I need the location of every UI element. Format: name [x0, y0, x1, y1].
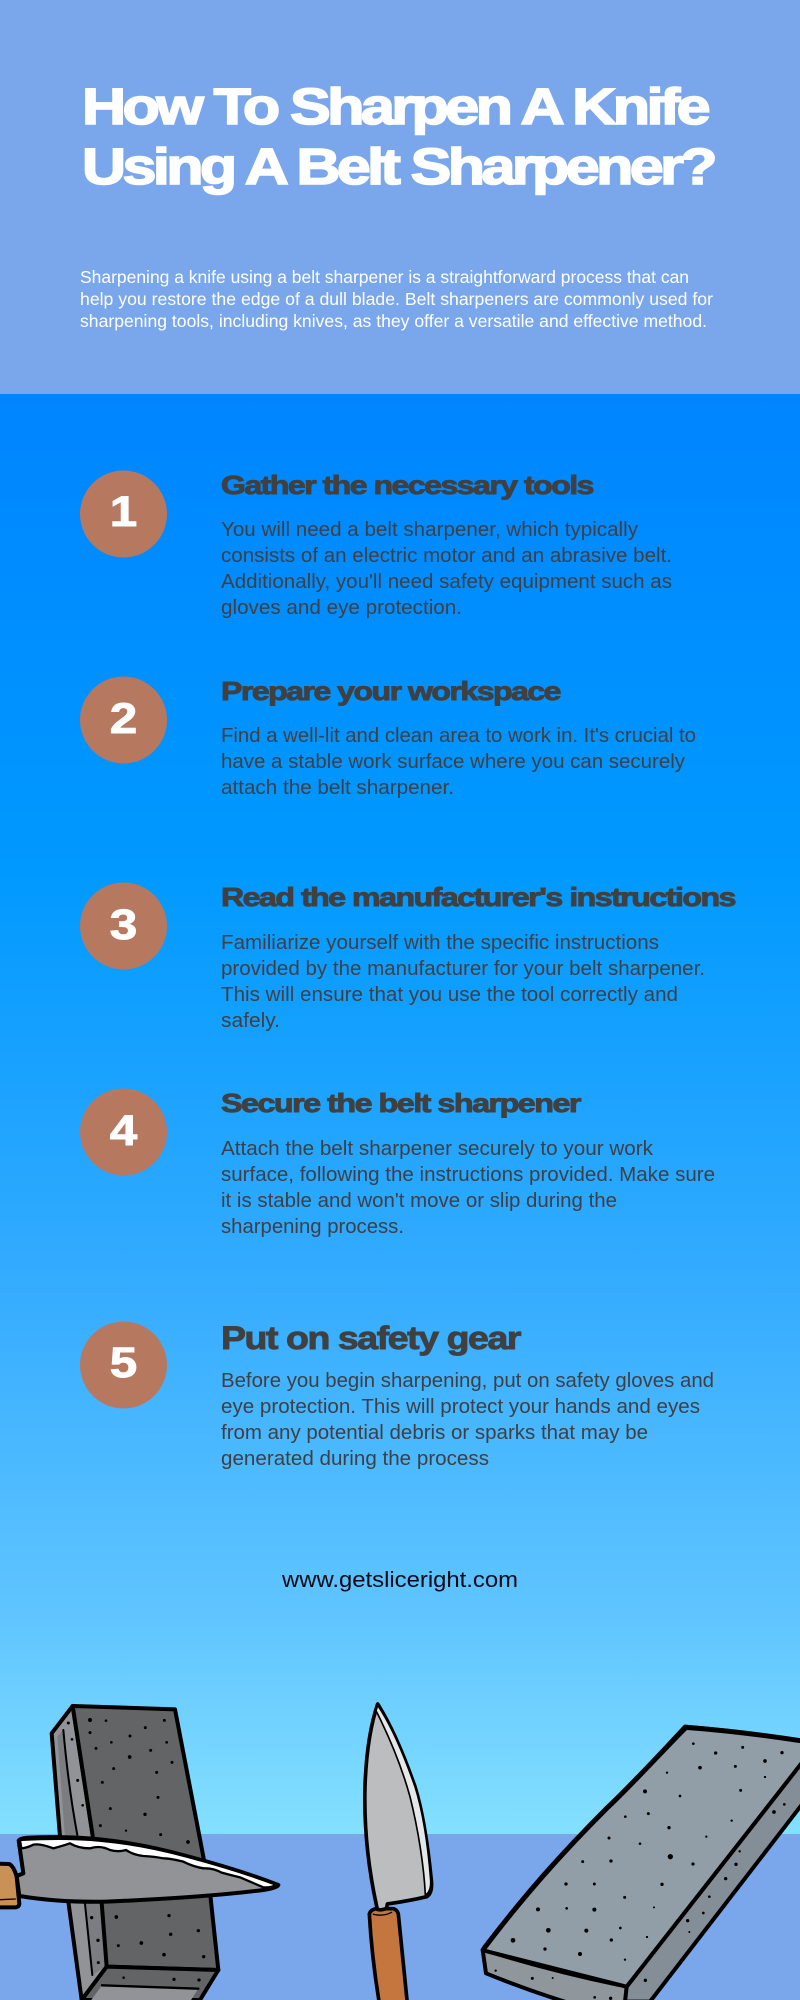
- knife handle: [0, 1864, 19, 1907]
- number badge 4: [80, 1088, 167, 1176]
- knife blade: [365, 1704, 432, 1910]
- panel: bottom table band: [0, 1834, 800, 2000]
- body text: step 5: generated during the process: [221, 1447, 489, 1470]
- number badge 4: 4: [110, 1106, 137, 1154]
- intro text block: [80, 267, 713, 331]
- intro text block: help you restore the edge of a dull blade. Belt sharpeners are commonly used for: [80, 289, 713, 309]
- body text: step 5: [221, 1369, 714, 1470]
- body text: step 3: [221, 931, 705, 1032]
- body text: step 2: attach the belt sharpener.: [221, 776, 454, 799]
- body text: step 4: Attach the belt sharpener securely to your work: [221, 1137, 654, 1160]
- body text: step 3: This will ensure that you use the tool correctly and: [221, 983, 678, 1006]
- website url: www.getsliceright.com: [281, 1567, 518, 1592]
- intro text block: sharpening tools, including knives, as they offer a versatile and effective method.: [80, 311, 707, 331]
- body text: step 3: provided by the manufacturer for your belt sharpener.: [221, 957, 705, 980]
- stone speckles: [67, 1718, 205, 1982]
- body text: step 2: [221, 724, 696, 799]
- intro text block: Sharpening a knife using a belt sharpener is a straightforward process that can: [80, 267, 689, 287]
- body text: step 4: surface, following the instructions provided. Make sure: [221, 1163, 715, 1186]
- number badge 1: [80, 470, 167, 558]
- body text: step 2: have a stable work surface where you can securely: [221, 750, 686, 773]
- body text: step 4: [221, 1137, 715, 1238]
- body text: step 1: Additionally, you'll need safety equipment such as: [221, 570, 672, 593]
- icon: chef knife: [365, 1704, 432, 2000]
- number badge 5: 5: [110, 1338, 137, 1386]
- number badge 3: [80, 882, 167, 970]
- panel: header background: [0, 0, 800, 394]
- heading: step 1: Gather the necessary tools: [221, 470, 594, 500]
- icon: sharpening stone with knife: [0, 1706, 278, 2000]
- stone front face: [73, 1706, 218, 1970]
- body text: step 1: consists of an electric motor and an abrasive belt.: [221, 544, 672, 567]
- body text: step 3: safely.: [221, 1009, 280, 1032]
- icon: whetstone: [483, 1727, 800, 2000]
- number badge 1: 1: [110, 487, 137, 535]
- stone front face: [483, 1950, 647, 2000]
- body text: step 2: Find a well-lit and clean area to work in. It's crucial to: [221, 724, 696, 747]
- body text: step 1: You will need a belt sharpener, which typically: [221, 518, 639, 541]
- number badge 2: [80, 676, 167, 764]
- body text: step 4: sharpening process.: [221, 1215, 404, 1238]
- panel: steps gradient background: [0, 394, 800, 1834]
- knife handle: [369, 1909, 407, 2000]
- heading: step 4: Secure the belt sharpener: [221, 1088, 581, 1118]
- panel: step 3: [80, 882, 736, 1032]
- stone top face: [483, 1727, 800, 1987]
- heading: step 2: Prepare your workspace: [221, 676, 561, 706]
- panel: step 1: [80, 470, 672, 619]
- number badge 3: 3: [110, 900, 137, 948]
- body text: step 5: eye protection. This will protect your hands and eyes: [221, 1395, 700, 1418]
- body text: step 5: from any potential debris or sparks that may be: [221, 1421, 648, 1444]
- body text: step 5: Before you begin sharpening, put on safety gloves and: [221, 1369, 714, 1392]
- stone bottom face: [82, 1967, 218, 2000]
- blade bright edge: [376, 1705, 431, 1895]
- title: How To Sharpen A Knife: [82, 78, 709, 135]
- panel: step 2: [80, 676, 696, 799]
- stone speckles: [494, 1742, 786, 2000]
- title: [82, 78, 715, 195]
- heading: step 3: Read the manufacturer's instructions: [221, 882, 736, 912]
- body text: step 1: gloves and eye protection.: [221, 596, 462, 619]
- stone side face: [52, 1706, 107, 2000]
- body text: step 3: Familiarize yourself with the specific instructions: [221, 931, 659, 954]
- knife blade: [17, 1837, 278, 1902]
- panel: step 5: [80, 1320, 714, 1470]
- title: Using A Belt Sharpener?: [82, 138, 715, 195]
- number badge 2: 2: [110, 694, 137, 742]
- stone right face: [625, 1757, 800, 2000]
- number badge 5: [80, 1322, 167, 1408]
- body text: step 1: [221, 518, 672, 619]
- body text: step 4: it is stable and won't move or slip during the: [221, 1189, 617, 1212]
- panel: step 4: [80, 1088, 715, 1238]
- heading: step 5: Put on safety gear: [221, 1320, 521, 1356]
- blade white edge: [20, 1839, 276, 1887]
